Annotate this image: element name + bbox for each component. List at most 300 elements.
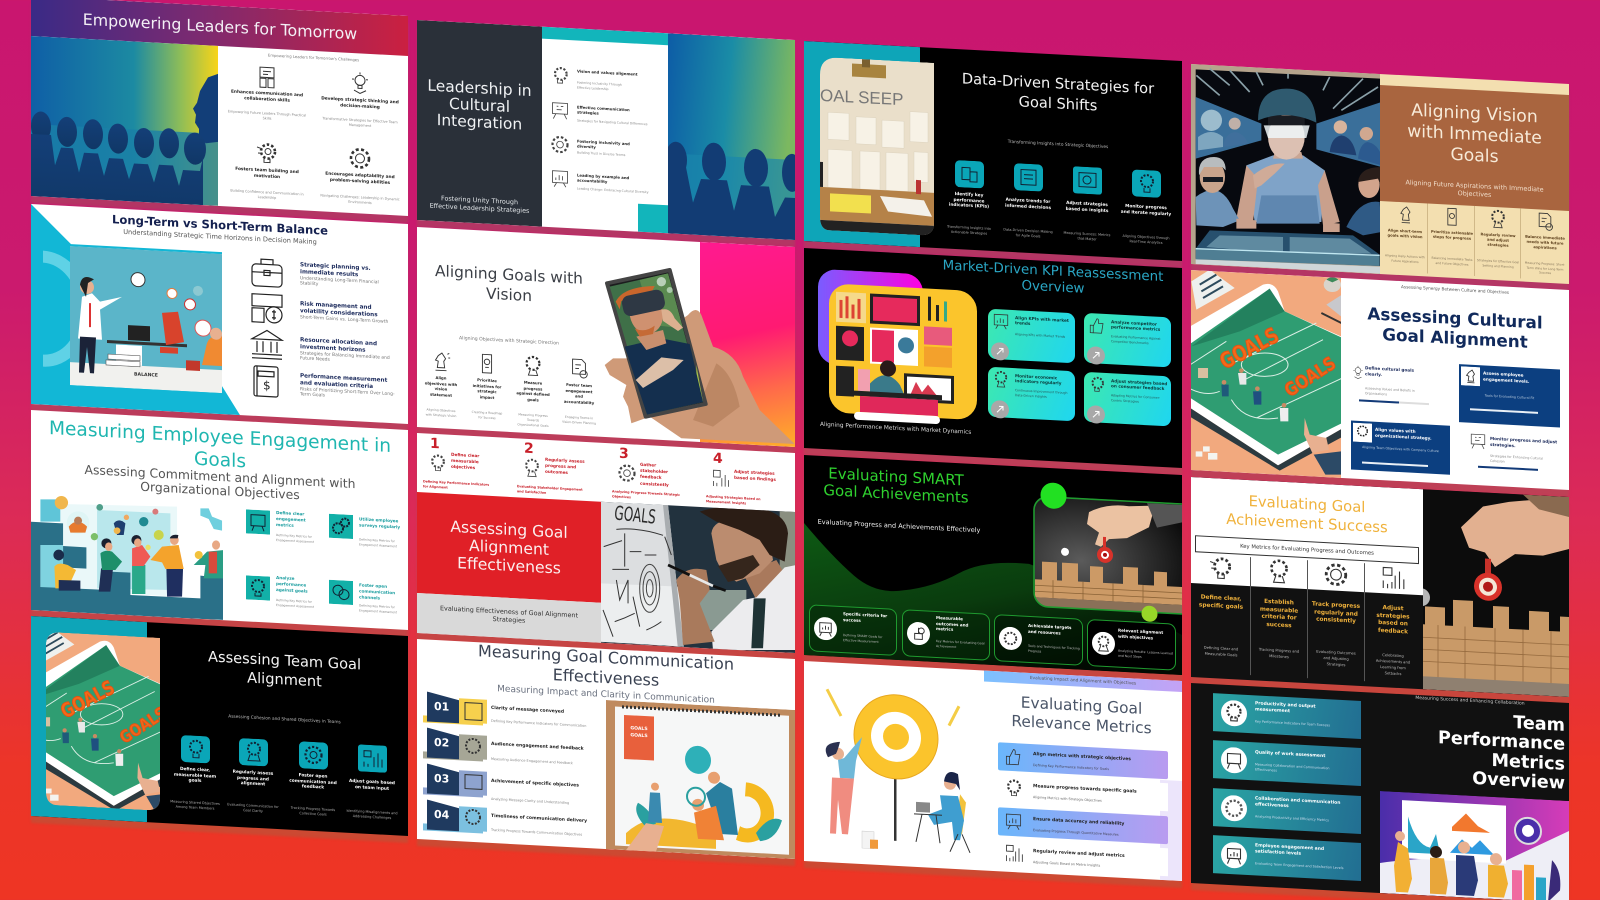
item: communication (227, 66, 306, 121)
title: Goal Shifts (1019, 93, 1097, 115)
item: assess progress: Evaluating Communication for Goal Clarity (227, 802, 278, 813)
item: adjust strategies: Measuring Success: Metrics that Matter (1064, 231, 1110, 241)
title: Overview (1021, 278, 1085, 296)
teal corner block (638, 204, 668, 233)
teal background shape (31, 204, 240, 415)
item: strategic planning: immediate results (300, 269, 358, 278)
item: adjust strategies: Adjust (1383, 605, 1404, 612)
title: Cultural (449, 95, 510, 116)
title (962, 70, 1154, 115)
card: engagement: Employee engagement and satisfaction levels (1255, 843, 1324, 857)
photo: man at whiteboard (601, 502, 795, 653)
item 2: assess progress: Evaluating Stakeholder Engagement and Satisfaction (517, 484, 583, 495)
photo: hand placing target on blocks (1423, 489, 1569, 697)
title (160, 645, 409, 696)
title: Aligning Goals with (435, 262, 583, 288)
item: vision: Vision and values alignment (577, 68, 638, 77)
title: Goal Alignment (1383, 324, 1528, 352)
item: align objectives: Align objectives with vision statement (425, 375, 458, 398)
photo: futuristic visionary (1191, 64, 1380, 274)
item: measure progress (516, 356, 550, 428)
item: open communication: Foster open communication and feedback (289, 773, 336, 791)
item 3: stakeholder feedback: Analyzing Progress Towards Strategic Objectives (612, 489, 680, 499)
card: achievable targets: Tools and Techniques for Tracking Progress (1028, 644, 1080, 653)
title: Metrics (1492, 751, 1565, 774)
item: engagement metrics: Define clear engagement metrics (276, 510, 305, 528)
title: Goals (1451, 145, 1499, 167)
card: engagement: Evaluating Team Engagement and Satisfaction Levels (1255, 861, 1344, 870)
title (989, 692, 1174, 739)
title (1361, 706, 1565, 794)
item 02: Measuring Audience Engagement and Feedback (491, 757, 573, 765)
item: strategic thinking (321, 72, 398, 128)
item: clear goals: Measurable Goals (1205, 652, 1238, 657)
title: Performance (1438, 728, 1565, 755)
item 2: assess progress: 2 (524, 441, 534, 457)
item: review strategies: Strategies for Effective Goal Setting and Planning (1477, 258, 1519, 269)
item: vision (554, 67, 638, 91)
title: Leadership in (428, 77, 532, 100)
card: measurable outcomes: Key Metrics for Evaluating Goal Achievement (936, 639, 984, 649)
caption: Aligning Performance Metrics with Market Dynamics (820, 422, 971, 436)
item: adjust strategies (1064, 166, 1110, 241)
subtitle: Strategies (493, 615, 526, 624)
card: specific criteria (809, 604, 897, 656)
item: clear goals: Defining Clear and (1204, 646, 1238, 651)
title: Market-Driven KPI Reassessment (943, 258, 1163, 285)
item: adjust strategies: strategies (1377, 612, 1410, 620)
item: communication: Effective communication strategies (577, 104, 630, 116)
title (1341, 302, 1569, 354)
title: Integration (437, 111, 522, 134)
title: Evaluating Goal (1021, 693, 1142, 718)
row: regular review (998, 839, 1168, 876)
title (1191, 489, 1423, 539)
title: Assessing Team Goal (208, 648, 361, 673)
item 04 (423, 799, 601, 843)
item: communication: Empowering Future Leaders Through Practical Skills (227, 109, 306, 121)
item: open communication: Tracking Progress Towards Collective Goals (290, 806, 335, 817)
key metrics box (1195, 535, 1419, 564)
title (428, 77, 532, 134)
subtitle (430, 194, 530, 215)
image: silhouettes of leaders (31, 36, 218, 206)
title: Vision (486, 285, 532, 305)
photo: hand placing target on wooden blocks (1033, 497, 1182, 615)
top gradient bar: Evaluating Impact and Alignment with Objectives (1030, 676, 1136, 687)
card: achievable targets: Achievable targets and resources (1028, 623, 1072, 635)
item: analyze performance (246, 575, 314, 608)
item: short-term goals: Aligning Daily Actions with Future Aspirations (1385, 253, 1425, 264)
item: assess progress (227, 737, 279, 822)
slide: Data-Driven Strategies for Goal Shifts (804, 41, 1182, 261)
item 04: 04 (434, 808, 450, 822)
item 02: 02 (434, 736, 450, 750)
card: achievable targets (994, 614, 1083, 666)
item: monitor progress: Monitor progress and adjust strategies. (1490, 436, 1557, 448)
item: measurable criteria: Establish (1264, 599, 1294, 606)
slide: Assessing Goal Alignment Effectiveness (417, 433, 795, 653)
title: Effectiveness (457, 554, 561, 578)
item: clear goals: Define clear, (1201, 595, 1242, 603)
image: goals playbook on desk: GOALS (1216, 323, 1284, 375)
slide: Team Performance Metrics Overview (1191, 683, 1569, 900)
subtitle (417, 604, 601, 629)
item: review strategies: Regularly review and adjust strategies (1481, 232, 1516, 247)
item: risk management: Short-Term Gains vs. Long-Term Growth (300, 315, 388, 325)
teal side band (31, 616, 147, 822)
item 2: assess progress: Regularly assess progress and outcomes (545, 457, 585, 475)
item: milestone steps: Prioritize actionable steps for progress (1431, 230, 1473, 241)
item 02: Audience engagement and feedback (491, 742, 584, 752)
subtitle: Objectives (1458, 189, 1492, 198)
item: adjust strategies: Celebrating (1383, 653, 1404, 658)
item: track progress: consistently (1316, 617, 1356, 625)
illustration: KPI dashboard wall (818, 269, 980, 427)
gradient side panel (700, 242, 795, 447)
card: measurable outcomes: Measurable outcomes and metrics (936, 615, 968, 632)
item: monitor progress: Monitor progress and iterate regularly (1121, 204, 1171, 217)
item: balance needs: Measuring Progress: Short-Term Wins for Long-Term Success (1525, 261, 1566, 275)
card: employee engagement (1459, 364, 1560, 428)
card: consumer feedback (1084, 372, 1171, 426)
card: organizational strategy (1351, 420, 1450, 475)
item: analyze performance: Analyze performance against goals (276, 575, 307, 594)
subtitle: Aligning Future Aspirations with Immediate (1406, 178, 1544, 194)
item 3: stakeholder feedback: 3 (619, 446, 629, 462)
item: open communication: Foster open communication channels (359, 582, 395, 600)
card: organizational strategy: Aligning Team Objectives with Company Culture (1362, 445, 1439, 453)
item: leading by example: Leading Change: Embracing Cultural Diversity (577, 186, 649, 194)
item: adjust strategies: feedback (1378, 628, 1408, 635)
item: analyze trends: Data-Driven Decision Making for Agile Goals (1003, 228, 1053, 239)
item: identify KPIs: Transforming Insights into Actionable Strategies (947, 225, 991, 236)
item: team engagement (562, 358, 596, 425)
item 1: measurable objectives (423, 436, 511, 497)
item: performance measurement: and evaluation criteria (300, 380, 373, 390)
orange notebook label: GOALS (631, 733, 648, 739)
item: milestone steps: Balancing Immediate Tasks and Future Objectives (1432, 256, 1473, 266)
item 03: 03 (434, 772, 450, 786)
item 3: stakeholder feedback (612, 446, 700, 507)
item: adaptability: Encourages adaptability and problem-solving abilities (325, 172, 394, 186)
title: Assessing Goal (451, 518, 568, 542)
item: risk management (251, 293, 388, 325)
item: short-term goals: Align short-term goals with vision (1388, 228, 1423, 239)
card: competitor metrics: Evaluating Performance Against Competitor Benchmarks (1111, 334, 1161, 345)
title: Goal Achievements (823, 481, 969, 507)
item: measure progress: Measuring Progress Towards Organizational Goals (518, 412, 549, 428)
item: prioritize initiatives: Prioritize initiatives for strategic impact (473, 377, 502, 400)
item: track progress: regularly and (1314, 609, 1358, 617)
slide: Aligning Goals with Vision (417, 227, 795, 447)
item: team building (230, 143, 304, 200)
card: engagement (1213, 835, 1361, 881)
title: with Immediate (1408, 121, 1542, 149)
title: Measuring Employee Engagement in (49, 418, 391, 457)
item: assess progress: Regularly assess progress and alignment (232, 770, 273, 788)
item: strategic planning: Stability (300, 282, 318, 288)
title: Aligning Vision (1412, 101, 1538, 127)
title: Goals (194, 449, 246, 472)
row: data accuracy: Ensure data accuracy and reliability (1033, 817, 1124, 827)
brown title panel (1380, 85, 1569, 211)
item: define team goals: Define clear, measurable team goals (173, 767, 216, 784)
item 4: adjust strategies (706, 451, 794, 512)
subtitle: Fostering Unity Through (441, 194, 518, 206)
item 4: adjust strategies: 4 (713, 451, 723, 467)
item: define team goals (169, 734, 221, 819)
title: Team (1513, 713, 1565, 736)
card: relevant alignment: Relevant alignment with objectives (1118, 628, 1163, 640)
title: Alignment (469, 537, 549, 559)
item: measure progress: Measure progress against defined goals (517, 380, 550, 402)
item: risk management: volatility considerations (300, 308, 377, 318)
title: Overview (1473, 769, 1565, 794)
item: track progress: Evaluating Outcomes (1317, 650, 1356, 656)
card: consumer feedback: Adjust strategies based on consumer feedback (1111, 378, 1167, 391)
title (417, 638, 795, 698)
slide: Evaluating SMART Goal Achievements (804, 455, 1182, 675)
card: productivity: Key Performance Indicators for Team Success (1255, 719, 1330, 727)
item: resource allocation: Strategies for Balancing Immediate and (300, 351, 389, 361)
item: align objectives: Aligning Objectives with Strategic Vision (426, 408, 457, 418)
item: team engagement: Engaging Teams in Vision-Driven Planning (562, 415, 596, 425)
row: data accuracy (998, 807, 1168, 844)
card: specific criteria: Specific criteria for success (843, 611, 887, 623)
item: measurable criteria (1250, 557, 1307, 678)
card: productivity (1213, 693, 1361, 739)
item: team engagement: Foster team engagement and accountability (564, 382, 594, 405)
item 1: measurable objectives: Defining Key Performance Indicators for Alignment (423, 479, 489, 490)
item: adjust goals (346, 744, 398, 828)
item 04: Timeliness of communication delivery (491, 814, 587, 824)
white top panel (1191, 477, 1423, 595)
subtitle: Organizational Objectives (140, 479, 299, 502)
subtitle: Effective Leadership Strategies (430, 201, 530, 215)
item: monitor progress: Strategies for Enhancing Cultural Cohesion (1490, 454, 1543, 463)
card: quality: Measuring Collaboration and Communication Effectiveness (1255, 762, 1330, 772)
subtitle: Assessing Commitment and Alignment with (84, 462, 355, 491)
title: Measuring Goal Communication (478, 641, 734, 674)
title: Relevance Metrics (1011, 711, 1152, 737)
item: track progress: Track progress (1312, 601, 1360, 610)
item: monitor progress (1120, 170, 1172, 245)
card: collaboration (1213, 788, 1361, 834)
card: economic indicators (988, 367, 1075, 421)
item: strategic thinking: Transformative Strategies for Effective Team Management (322, 116, 397, 128)
item 01: Defining Key Performance Indicators for Communication (491, 719, 587, 728)
row: align metrics: Defining Key Performance Indicators for Goals (1033, 763, 1109, 771)
item: performance measurement: $ (263, 378, 270, 393)
photo: hand holding phone (604, 268, 794, 444)
illustration: team reviewing charts (1380, 791, 1569, 900)
item: review strategies (1476, 206, 1521, 278)
card: competitor metrics (1084, 313, 1171, 367)
caption: Measuring Success and Enhancing Collaboration (1416, 696, 1525, 707)
item 3: stakeholder feedback: Gather stakeholder feedback consistently (640, 462, 669, 487)
title (417, 516, 601, 580)
item: risk management: Risk management and (300, 301, 371, 311)
image: goals playbook: GOALS (56, 676, 118, 723)
item: analyze performance: Defining Key Metrics for Engagement Assessment (276, 598, 314, 608)
card: employee engagement: Tools for Evaluating Cultural Fit (1485, 394, 1535, 400)
row: regular review: Regularly review and adjust metrics (1033, 849, 1125, 859)
item: clear goals (1193, 554, 1249, 675)
title: Alignment (247, 669, 321, 690)
item: identify KPIs (947, 160, 991, 236)
slide: Assessing Cultural Goal Alignment (1191, 270, 1569, 490)
item: inclusivity: Fostering inclusivity and diversity (577, 138, 630, 149)
row: regular review: Adjusting Goals Based on Metric Insights (1033, 860, 1100, 868)
card: productivity: Productivity and output measurement (1255, 701, 1316, 714)
item: align objectives (424, 352, 458, 418)
subtitle: Assessing Synergy Between Culture and Objectives (1401, 284, 1509, 295)
item: strategic planning: Strategic planning vs. (300, 262, 370, 272)
orange notebook label: GOALS (631, 726, 648, 732)
item: define cultural goals (1351, 362, 1451, 414)
card: economic indicators: Monitor economic indicators regularly (1015, 373, 1061, 386)
item: employee surveys: Utilize employee surveys regularly (359, 516, 400, 530)
item: analyze trends: Analyze trends for informed decisions (1005, 198, 1051, 211)
item: performance measurement (253, 365, 394, 399)
slide: Market-Driven KPI Reassessment Overview (804, 248, 1182, 468)
slide: Evaluating Goal Achievement Success (1191, 477, 1569, 697)
title: Evaluating SMART (828, 464, 964, 489)
card: consumer feedback: Adapting Metrics for Consumer-Centric Strategies (1111, 393, 1160, 403)
item: short-term goals (1383, 201, 1428, 274)
item: prioritize initiatives (472, 354, 503, 420)
subtitle: Transforming Insights into Strategic Objectives (1008, 140, 1108, 150)
photo: goal whiteboard: OAL SEEP (820, 86, 903, 109)
card: employee engagement: Assess employee engagement levels. (1483, 370, 1530, 384)
image: silhouettes (668, 33, 795, 240)
card: quality (1213, 740, 1361, 786)
row: measure progress: Aligning Metrics with Strategic Objectives (1033, 795, 1102, 803)
item: analyze trends (1003, 163, 1053, 239)
item: vision: Fostering Inclusivity Through Effective Leadership (577, 80, 622, 91)
item 4: adjust strategies: Adjust strategies based on findings (734, 469, 776, 482)
row: measure progress (998, 774, 1168, 811)
header bar (31, 0, 409, 56)
item 01 (423, 691, 601, 735)
item: communication: Strategies for Navigating Cultural Differences (577, 118, 648, 126)
item: engagement metrics: Defining Key Metrics for Engagement Assessment (276, 533, 314, 543)
item: communication (552, 102, 648, 126)
item: balance needs (1525, 212, 1566, 275)
item 2: assess progress (517, 441, 605, 502)
card: competitor metrics: Analyze competitor performance metrics (1111, 319, 1160, 332)
title: Evaluating Goal (1249, 493, 1366, 516)
item: leading by example: Leading by example and accountability (577, 172, 630, 184)
slide: Long-Term vs Short-Term Balance (31, 204, 408, 424)
teal top band (542, 27, 668, 45)
item: resource allocation: Resource allocation and (300, 337, 377, 347)
illustration: target and people (804, 676, 984, 871)
card: relevant alignment (1087, 619, 1176, 671)
card: align KPIs (988, 309, 1075, 363)
title (1408, 101, 1542, 167)
subtitle: Measuring Impact and Clarity in Communication (497, 684, 715, 706)
item: team building: Building Confidence and Communication in Leadership (230, 189, 303, 200)
item: inclusivity: Building Trust in Diverse Teams (577, 150, 626, 157)
item: track progress: and Adjusting (1324, 656, 1349, 661)
card: align KPIs: Align KPIs with market trends (1015, 315, 1069, 326)
item: measurable criteria: Tracking Progress and (1259, 648, 1299, 654)
slide: Empowering Leaders for Tomorrow (31, 0, 408, 216)
item: inclusivity (551, 136, 630, 157)
subtitle: Aligning Objectives with Strategic Direction (459, 336, 559, 347)
slide: Measuring Goal Communication Effectiveness (417, 639, 795, 859)
item: resource allocation: investment horizons (300, 344, 365, 353)
gray subtitle band (417, 593, 601, 643)
item 4: adjust strategies: Adjusting Strategies Based on Measurement Insights (706, 494, 761, 505)
illustration: balance book cover (70, 246, 222, 394)
item: adjust strategies: based on (1378, 620, 1408, 628)
row: measure progress: Measure progress towards specific goals (1033, 784, 1137, 795)
title: Assessing Cultural (1368, 303, 1543, 333)
row: align metrics (998, 742, 1168, 779)
card: economic indicators: Continuous Improvement through Data-Driven Insights (1015, 388, 1067, 398)
item: adjust strategies: Adjust strategies based on insights (1066, 201, 1108, 214)
photo: notebook with growth illustration (606, 700, 795, 859)
card: measurable outcomes (902, 609, 990, 661)
row: data accuracy: Evaluating Progress Through Quantitative Measures (1033, 828, 1119, 837)
item 03 (423, 763, 601, 807)
teal side band (804, 41, 920, 247)
item: track progress (1307, 560, 1364, 681)
item: track progress: Strategies (1327, 662, 1346, 667)
item: adaptability (320, 148, 400, 205)
item 01: 01 (434, 700, 450, 714)
dark title panel (417, 20, 542, 227)
key metrics box: Key Metrics for Evaluating Progress and Outcomes (1240, 544, 1374, 557)
item 03: Analyzing Message Clarity and Understanding (491, 797, 569, 805)
item: adjust strategies: Learning from (1380, 665, 1406, 670)
item: milestone steps (1430, 204, 1475, 276)
item 01: Clarity of message conveyed (491, 706, 564, 715)
card: quality: Quality of work assessment (1255, 750, 1326, 759)
item: balance needs: Balance immediate needs with future aspirations (1525, 235, 1565, 250)
orange notebook label (624, 725, 654, 741)
title: Effectiveness (553, 665, 660, 690)
subtitle: Evaluating Progress and Achievements Effectively (818, 518, 980, 534)
card: specific criteria: Defining SMART Goals for Effective Measurement (843, 633, 882, 644)
item: resource allocation: Future Needs (300, 357, 329, 363)
item: measurable criteria: success (1267, 622, 1292, 629)
item: adjust goals: Adjust goals based on team input (349, 779, 395, 792)
item: performance measurement: Risks of Prioritizing Short-Term Over Long- (300, 387, 394, 397)
item: strategic thinking: Develops strategic thinking and decision-making (321, 96, 398, 110)
image: goals playbook (46, 632, 160, 810)
card: collaboration: Analyzing Productivity and Efficiency Metrics (1255, 814, 1329, 822)
title (924, 257, 1182, 302)
item: adjust strategies (1364, 563, 1421, 684)
item: define cultural goals: Assessing Values and Beliefs in Organizations (1365, 386, 1415, 396)
subtitle: Understanding Strategic Time Horizons in Decision Making (123, 228, 316, 246)
photo: man at whiteboard: GOALS (613, 502, 657, 529)
item: open communication: Defining Key Metrics for Engagement Assessment (359, 603, 397, 614)
item 03: Achievement of specific objectives (491, 779, 579, 789)
title: Long-Term vs Short-Term Balance (112, 212, 328, 238)
item: monitor progress: Aligning Objectives through Real-Time Analytics (1122, 234, 1170, 245)
slide: Leadership in Cultural Integration (417, 20, 795, 240)
item: engagement metrics (246, 509, 314, 543)
item 02 (423, 727, 601, 771)
item: prioritize initiatives: Creating a Roadmap for Success (472, 410, 503, 420)
item: adaptability: Navigating Challenges: Leadership in Dynamic Environments (320, 193, 399, 205)
row: align metrics: Align metrics with strategic objectives (1033, 752, 1131, 762)
